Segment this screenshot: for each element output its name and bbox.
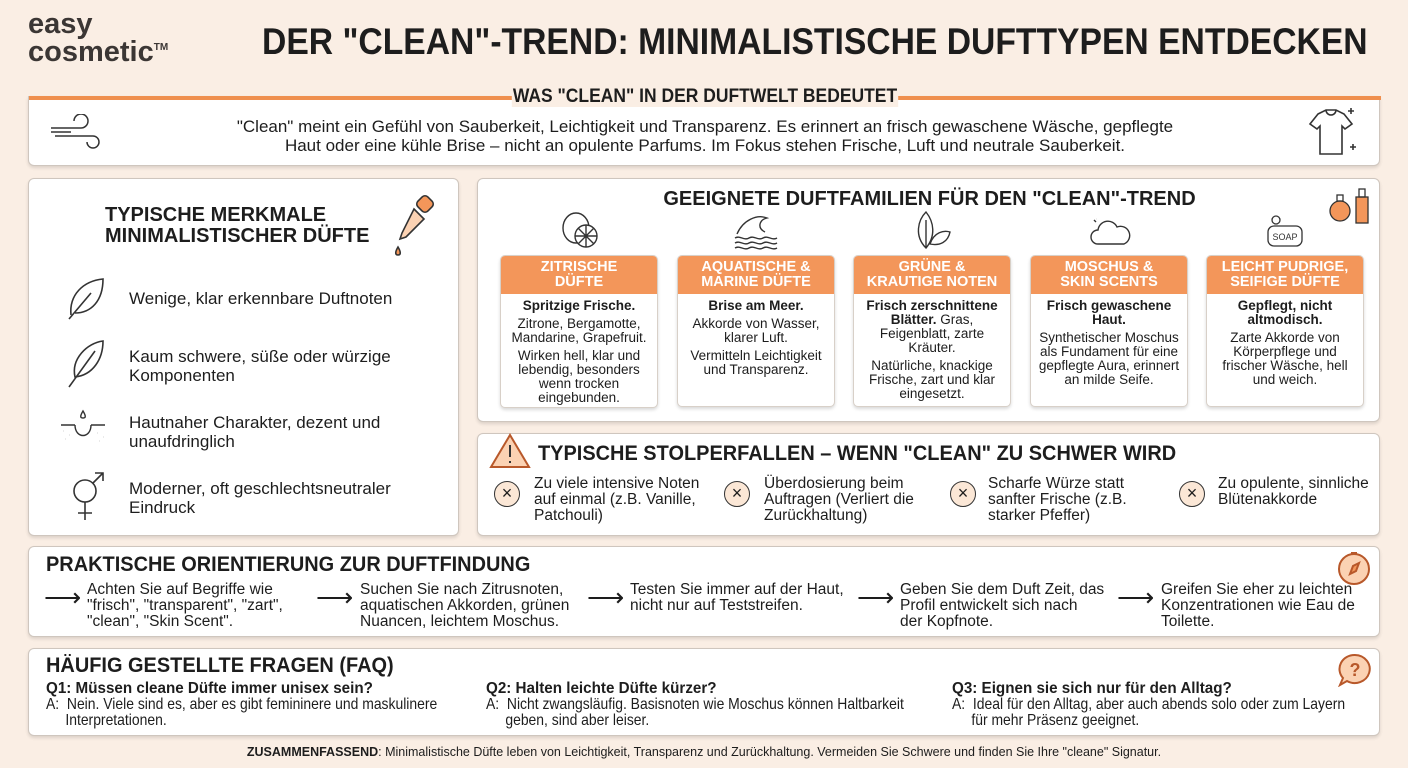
icon: question bubble: ? bbox=[1350, 660, 1360, 680]
card: aquatisch: Akkorde von Wasser, klarer Luft. bbox=[692, 316, 820, 345]
card: zitrisch bbox=[500, 255, 658, 408]
card: aquatisch: MARINE DÜFTE bbox=[701, 274, 811, 290]
pitfall 2: Zurückhaltung) bbox=[764, 507, 867, 524]
item 4: Moderner, oft geschlechtsneutraler bbox=[129, 479, 391, 498]
step 1: ⟶ bbox=[44, 582, 81, 612]
icon: leaves bbox=[918, 211, 951, 249]
step 5 bbox=[1117, 581, 1355, 630]
faq 2: A: Nicht zwangsläufig. Basisnoten wie Moschus können Haltbarkeit bbox=[486, 696, 904, 713]
intro text bbox=[237, 117, 1173, 155]
faq 1: Interpretationen. bbox=[65, 712, 167, 729]
icon: skin bbox=[61, 410, 105, 442]
step 4: Geben Sie dem Duft Zeit, das bbox=[900, 581, 1104, 598]
step 4: Profil entwickelt sich nach bbox=[900, 597, 1077, 614]
footer summary: ZUSAMMENFASSEND: Minimalistische Düfte leben von Leichtigkeit, Transparenz und Zurückhaltung. Vermeiden Sie Schwere und finden Sie Ihre "cleane" Signatur. bbox=[247, 745, 1161, 759]
icon: soap bbox=[1267, 215, 1303, 247]
faq 3 bbox=[952, 680, 1345, 729]
card: moschus: MOSCHUS & bbox=[1065, 259, 1153, 275]
item 3 bbox=[61, 410, 380, 451]
pitfall 3: starker Pfeffer) bbox=[988, 507, 1090, 524]
pitfall 3: sanfter Frische (z.B. bbox=[988, 491, 1127, 508]
faq 2 bbox=[486, 680, 904, 729]
item 4: Eindruck bbox=[129, 498, 195, 517]
icon: question bubble bbox=[1338, 654, 1371, 687]
icon: shirt bbox=[1308, 108, 1356, 155]
item 1: Wenige, klar erkennbare Duftnoten bbox=[129, 289, 392, 308]
card: pudrig bbox=[1206, 255, 1364, 407]
card: zitrisch: Zitrone, Bergamotte, Mandarine, Grapefruit. bbox=[511, 316, 647, 345]
faq 3: Q3: Eignen sie sich nur für den Alltag? bbox=[952, 680, 1232, 697]
panel: stolperfallen bbox=[477, 433, 1380, 536]
pitfall 1: Zu viele intensive Noten bbox=[534, 475, 699, 492]
step 2 bbox=[316, 581, 569, 630]
merkmale heading: MINIMALISTISCHER DÜFTE bbox=[105, 225, 369, 247]
pitfall 2: × bbox=[732, 483, 742, 503]
pitfall 3 bbox=[950, 475, 1127, 524]
panel: merkmale bbox=[28, 178, 459, 536]
pitfall 2: Überdosierung beim bbox=[764, 475, 904, 492]
item 2: Kaum schwere, süße oder würzige bbox=[129, 347, 391, 366]
card: aquatisch: AQUATISCHE & bbox=[701, 259, 811, 275]
pitfall 1: Patchouli) bbox=[534, 507, 603, 524]
title: DER "CLEAN"-TREND: MINIMALISTISCHE DUFTTYPEN ENTDECKEN bbox=[262, 21, 1368, 62]
icon: cloud bbox=[1090, 218, 1130, 245]
faq 3: A: Ideal für den Alltag, aber auch abends solo oder zum Layern bbox=[952, 696, 1345, 713]
faq 1: Q1: Müssen cleane Düfte immer unisex sein? bbox=[46, 680, 373, 697]
card: zitrisch: DÜFTE bbox=[555, 274, 603, 290]
card: grün: KRAUTIGE NOTEN bbox=[867, 274, 997, 290]
orientierung heading: PRAKTISCHE ORIENTIERUNG ZUR DUFTFINDUNG bbox=[46, 553, 530, 576]
step 2: Suchen Sie nach Zitrusnoten, bbox=[360, 581, 563, 598]
panel: faq bbox=[28, 648, 1380, 736]
item 3: Hautnaher Charakter, dezent und bbox=[129, 413, 380, 432]
card: pudrig: LEICHT PUDRIGE, bbox=[1222, 259, 1348, 275]
step 2: ⟶ bbox=[316, 582, 353, 612]
intro heading: WAS "CLEAN" IN DER DUFTWELT BEDEUTET bbox=[513, 86, 897, 107]
icon: wind bbox=[51, 114, 100, 149]
icon: leaf bbox=[68, 278, 104, 320]
step 3: ⟶ bbox=[587, 582, 624, 612]
logo: easy bbox=[28, 8, 93, 40]
intro text: Haut oder eine kühle Brise – nicht an opulente Parfums. Im Fokus stehen Frische, Luft und neutrale Sauberkeit. bbox=[285, 136, 1125, 155]
step 4: ⟶ bbox=[857, 582, 894, 612]
intro text: "Clean" meint ein Gefühl von Sauberkeit, Leichtigkeit und Transparenz. Es erinnert an frisch gewaschene Wäsche, gepflegte bbox=[237, 117, 1173, 136]
pitfall 2 bbox=[724, 474, 914, 524]
icon: warning bbox=[489, 433, 531, 468]
card: grün: Frisch zerschnittene Blätter. Gras, Feigenblatt, zarte Kräuter. bbox=[866, 298, 998, 355]
card: grün: GRÜNE & bbox=[899, 259, 965, 275]
step 5: Konzentrationen wie Eau de bbox=[1161, 597, 1355, 614]
step 3: Testen Sie immer auf der Haut, bbox=[630, 581, 844, 598]
icon: wave bbox=[734, 216, 778, 250]
step 3: nicht nur auf Teststreifen. bbox=[630, 597, 803, 614]
orange line bbox=[29, 96, 1381, 100]
logo: cosmeticTM bbox=[28, 36, 168, 68]
step 1 bbox=[44, 581, 283, 630]
pitfall 1 bbox=[494, 475, 699, 524]
merkmale heading: TYPISCHE MERKMALE bbox=[105, 204, 326, 226]
pitfall 4: Blütenakkorde bbox=[1218, 491, 1317, 508]
item 4 bbox=[73, 472, 391, 520]
icon: compass bbox=[1338, 552, 1370, 585]
icon: dropper bbox=[394, 195, 434, 256]
card: pudrig: Zarte Akkorde von Körperpflege und frischer Wäsche, hell und weich. bbox=[1222, 330, 1348, 387]
card: moschus bbox=[1030, 255, 1188, 407]
icon: soap: SOAP bbox=[1272, 232, 1298, 242]
panel: orientierung bbox=[28, 546, 1380, 637]
step 1: Achten Sie auf Begriffe wie bbox=[87, 581, 273, 598]
item 1 bbox=[68, 278, 392, 320]
faq 1: A: Nein. Viele sind es, aber es gibt femininere und maskulinere bbox=[46, 696, 437, 713]
item 2 bbox=[68, 340, 391, 388]
card: moschus: Frisch gewaschene Haut. bbox=[1047, 298, 1171, 327]
logo bbox=[28, 8, 168, 68]
pitfall 1: × bbox=[502, 483, 512, 503]
faq 3: für mehr Präsenz geeignet. bbox=[971, 712, 1139, 729]
faq 2: Q2: Halten leichte Düfte kürzer? bbox=[486, 680, 717, 697]
card: pudrig: Gepflegt, nicht altmodisch. bbox=[1238, 298, 1332, 327]
card: moschus: SKIN SCENTS bbox=[1060, 274, 1158, 290]
panel: duftfamilien bbox=[477, 178, 1380, 422]
step 5: Greifen Sie eher zu leichten bbox=[1161, 581, 1352, 598]
pitfall 2: Auftragen (Verliert die bbox=[764, 491, 914, 508]
card: moschus: Synthetischer Moschus als Fundament für eine gepflegte Aura, erinnert an milde Seife. bbox=[1039, 330, 1179, 387]
pitfall 4 bbox=[1179, 475, 1369, 508]
icon: perfume bottles bbox=[1329, 188, 1369, 224]
card: aquatisch bbox=[677, 255, 835, 407]
step 5: Toilette. bbox=[1161, 613, 1214, 630]
merkmale heading bbox=[105, 204, 369, 247]
pitfall 4: × bbox=[1187, 483, 1197, 503]
pitfalls heading: TYPISCHE STOLPERFALLEN – WENN "CLEAN" ZU SCHWER WIRD bbox=[538, 442, 1176, 465]
icon: lemon bbox=[562, 212, 598, 248]
step 4: der Kopfnote. bbox=[900, 613, 993, 630]
card: pudrig: SEIFIGE DÜFTE bbox=[1230, 274, 1340, 290]
step 2: Nuancen, leichtem Moschus. bbox=[360, 613, 559, 630]
card: zitrisch: ZITRISCHE bbox=[541, 259, 617, 275]
card: zitrisch: Spritzige Frische. bbox=[523, 298, 635, 313]
pitfall 3: × bbox=[958, 483, 968, 503]
icon: feather bbox=[68, 340, 104, 388]
step 4 bbox=[857, 581, 1104, 630]
pitfall 3: Scharfe Würze statt bbox=[988, 475, 1124, 492]
step 1: "clean", "Skin Scent". bbox=[87, 613, 233, 630]
card: grün: Natürliche, knackige Frische, zart und klar eingesetzt. bbox=[869, 358, 995, 401]
faq 2: geben, sind aber leiser. bbox=[505, 712, 649, 729]
step 5: ⟶ bbox=[1117, 582, 1154, 612]
faq 1 bbox=[46, 680, 437, 729]
step 1: "frisch", "transparent", "zart", bbox=[87, 597, 283, 614]
card: zitrisch: Wirken hell, klar und lebendig, besonders wenn trocken eingebunden. bbox=[518, 348, 640, 405]
item 3: unaufdringlich bbox=[129, 432, 235, 451]
pitfall 1: auf einmal (z.B. Vanille, bbox=[534, 491, 696, 508]
pitfall 4: Zu opulente, sinnliche bbox=[1218, 475, 1369, 492]
step 3 bbox=[587, 581, 844, 614]
card: aquatisch: Brise am Meer. bbox=[708, 298, 804, 313]
step 2: aquatischen Akkorden, grünen bbox=[360, 597, 569, 614]
families heading: GEEIGNETE DUFTFAMILIEN FÜR DEN "CLEAN"-TREND bbox=[663, 188, 1196, 210]
panel: intro bbox=[28, 96, 1380, 166]
item 2: Komponenten bbox=[129, 366, 235, 385]
card: grün bbox=[853, 255, 1011, 407]
card: aquatisch: Vermitteln Leichtigkeit und Transparenz. bbox=[690, 348, 822, 377]
icon: gender bbox=[73, 472, 104, 520]
faq heading: HÄUFIG GESTELLTE FRAGEN (FAQ) bbox=[46, 654, 394, 677]
